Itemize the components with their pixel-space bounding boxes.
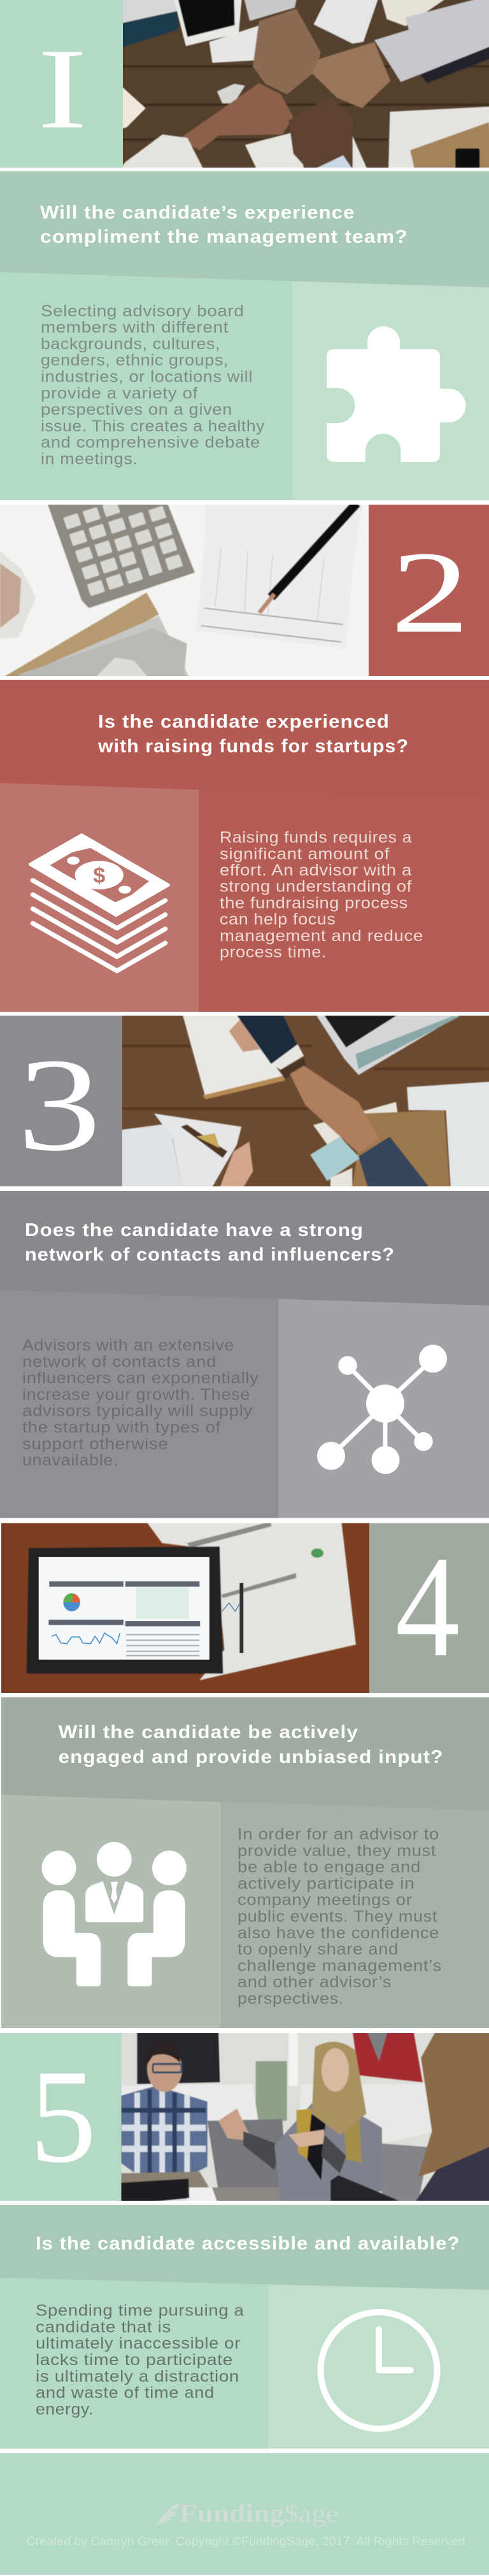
body text 2: management and reduce	[220, 927, 423, 945]
panel: icon and text backgrounds	[0, 777, 489, 1012]
heading band 1	[0, 171, 489, 287]
body text 4: and other advisor’s	[237, 1973, 392, 1991]
footer	[0, 2453, 489, 2575]
body text 5: lacks time to participate	[36, 2351, 233, 2369]
heading band 2	[0, 680, 489, 800]
icon: stack of money	[29, 833, 170, 974]
body text 3: unavailable.	[22, 1451, 118, 1469]
heading band 2: with raising funds for startups?	[97, 737, 409, 757]
photo: fists together on a wooden table	[123, 0, 489, 168]
body text 5: is ultimately a distraction	[36, 2368, 239, 2385]
body text 3: the startup with types of	[22, 1418, 221, 1436]
body text 2: can help focus	[220, 910, 336, 928]
number block 2: 2	[390, 528, 470, 658]
section 5	[0, 2029, 489, 2449]
icon: network nodes	[317, 1344, 447, 1474]
body text 1: backgrounds, cultures,	[41, 335, 220, 353]
icon: clock	[321, 2312, 437, 2429]
panel: text and icon backgrounds	[0, 2271, 489, 2449]
number block 5: 5	[29, 2043, 97, 2191]
body text 1	[41, 302, 265, 468]
body text 4: public events. They must	[237, 1908, 437, 1925]
icon: three people in a meeting	[42, 1841, 187, 1987]
panel: icon and text backgrounds	[1, 1790, 489, 2028]
photo: tablet with analytics dashboard on a desk	[1, 1523, 369, 1693]
section 1	[0, 0, 489, 500]
heading band 5	[0, 2205, 489, 2290]
body text 2: effort. An advisor with a	[220, 861, 412, 879]
body text 1: provide a variety of	[41, 384, 198, 402]
body text 1: issue. This creates a healthy	[41, 417, 265, 435]
body text 1: genders, ethnic groups,	[41, 352, 229, 370]
body text 4: to openly share and	[237, 1941, 399, 1959]
body text 3: network of contacts and	[22, 1353, 216, 1371]
body text 4: be able to engage and	[237, 1859, 421, 1876]
body text 4: company meetings or	[237, 1891, 413, 1909]
number block 1: I	[38, 25, 87, 153]
section 2	[0, 501, 489, 1012]
icon: stack of money: $	[93, 864, 105, 888]
body text 4: actively participate in	[237, 1874, 415, 1892]
heading band 1: compliment the management team?	[40, 227, 408, 247]
heading band 3: Does the candidate have a strong	[25, 1220, 364, 1241]
body text 3: influencers can exponentially	[22, 1369, 259, 1387]
body text 4: also have the confidence	[237, 1924, 439, 1942]
photo: calculator, notebook, pen and money	[0, 505, 369, 676]
body text 2: process time.	[220, 943, 327, 961]
body text 3: support otherwise	[22, 1435, 168, 1453]
number block 5	[0, 2033, 121, 2201]
body text 4	[237, 1825, 442, 2008]
body text 2	[220, 829, 423, 961]
body text 3: advisors typically will supply	[22, 1402, 253, 1420]
body text 1: and comprehensive debate	[41, 434, 260, 452]
panel: text and icon backgrounds	[0, 268, 489, 500]
body text 3: Advisors with an extensive	[22, 1337, 234, 1355]
heading band 4: Will the candidate be actively	[59, 1722, 358, 1743]
icon: puzzle piece	[327, 326, 466, 462]
heading band 3	[0, 1191, 489, 1306]
panel: text and icon backgrounds	[0, 1284, 489, 1518]
number block 3	[0, 1016, 122, 1186]
body text 5: ultimately inaccessible or	[36, 2335, 241, 2352]
body text 1: in meetings.	[41, 450, 138, 468]
body text 4: In order for an advisor to	[237, 1825, 439, 1843]
heading band 2: Is the candidate experienced	[98, 712, 390, 732]
body text 2: Raising funds requires a	[220, 829, 412, 847]
number block 4	[369, 1523, 489, 1693]
heading band 1: Will the candidate’s experience	[40, 203, 355, 223]
number block 4: 4	[395, 1526, 460, 1687]
body text 1: industries, or locations will	[41, 368, 253, 386]
body text 5: energy.	[36, 2400, 94, 2418]
body text 2: significant amount of	[220, 845, 390, 863]
heading band 3: network of contacts and influencers?	[25, 1245, 395, 1265]
body text 5: Spending time pursuing a	[36, 2302, 244, 2320]
logo: Funding $age	[180, 2499, 339, 2528]
heading band 5: Is the candidate accessible and available?	[36, 2234, 460, 2254]
heading band 4	[1, 1697, 489, 1811]
body text 2: strong understanding of	[220, 878, 412, 896]
number block 2	[369, 505, 489, 676]
body text 1: Selecting advisory board	[41, 302, 244, 320]
body text 5: and waste of time and	[36, 2384, 215, 2402]
section 3	[0, 1013, 489, 1518]
number block 3: 3	[17, 1031, 101, 1179]
body text 1: perspectives on a given	[41, 401, 232, 419]
number block 1	[0, 0, 123, 168]
body text 4: challenge management’s	[237, 1957, 442, 1975]
body text 2: the fundraising process	[220, 894, 408, 912]
body text 5: candidate that is	[36, 2318, 171, 2336]
photo: people talking on sofas in an office	[121, 2033, 489, 2201]
body text 3: increase your growth. These	[22, 1386, 250, 1404]
section 4	[1, 1520, 489, 2028]
body text 3	[22, 1337, 259, 1469]
body text 4: provide value, they must	[237, 1842, 436, 1860]
photo: handshake over a wooden desk	[122, 1016, 489, 1186]
copyright line: Created by Camryn Greer. Copyright ©FundingSage, 2017. All Rights Reserved.	[27, 2535, 469, 2547]
heading band 4: engaged and provide unbiased input?	[59, 1747, 444, 1767]
body text 4: perspectives.	[237, 1990, 344, 2008]
body text 1: members with different	[41, 319, 229, 336]
body text 5	[36, 2302, 244, 2418]
